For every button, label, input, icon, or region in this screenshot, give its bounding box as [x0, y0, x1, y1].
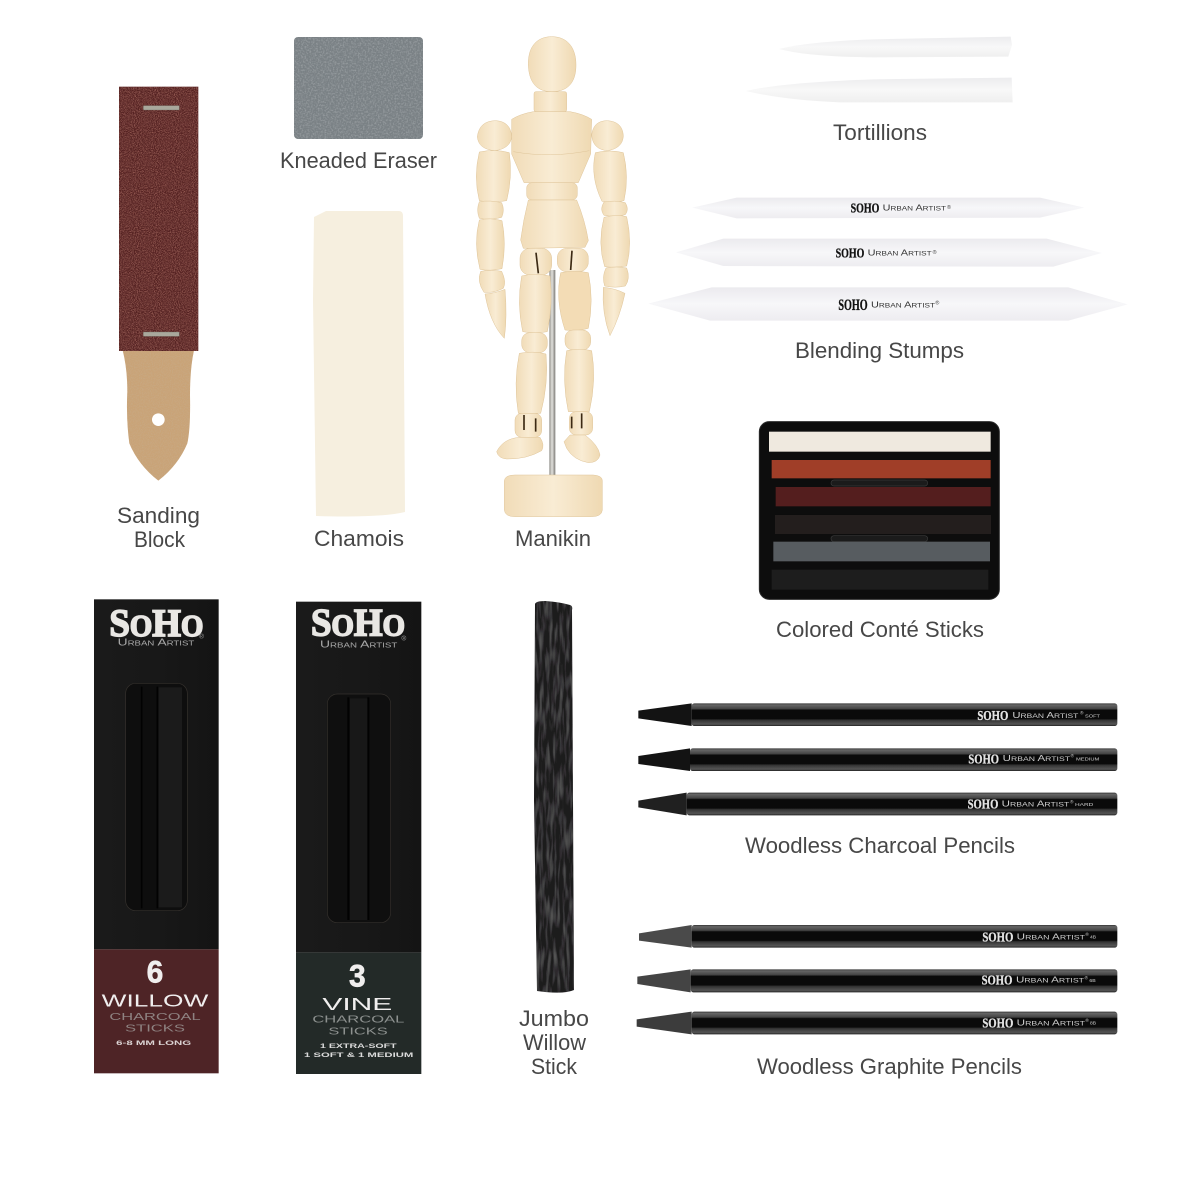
- box text: [102, 955, 209, 1047]
- stump 1: [692, 198, 1084, 218]
- item: kneaded eraser: [294, 37, 423, 139]
- label: Chamois: Chamois: [314, 526, 404, 551]
- item: blending stumps: [648, 198, 1128, 321]
- pencil 8B: ®: [1085, 1017, 1089, 1023]
- pencil soft: SOHO: [977, 709, 1008, 724]
- vine sticks in window: [348, 697, 368, 920]
- label: Sanding Block: Block: [134, 527, 186, 552]
- pencil hard: ®: [1070, 798, 1074, 804]
- pencil 4B: 4B: [1090, 934, 1096, 939]
- window: [327, 694, 391, 923]
- pencil soft: SOFT: [1085, 713, 1100, 718]
- pencil hard: SOHO: [968, 797, 998, 812]
- label: Woodless Graphite Pencils: Woodless Graphite Pencils: [757, 1054, 1022, 1079]
- right arm: [592, 121, 630, 336]
- grey stick: [773, 542, 990, 561]
- pencil 4B: Urban Artist: [1017, 932, 1085, 941]
- stump 2: ®: [933, 249, 937, 256]
- logo: ®: [401, 635, 406, 643]
- box body: [296, 602, 421, 953]
- label: Sanding Block: Sanding: [117, 503, 200, 528]
- pencil 4B: ®: [1085, 931, 1089, 937]
- stand rod: [549, 270, 555, 476]
- pencil soft: ®: [1080, 710, 1084, 716]
- stump 3: ®: [935, 299, 939, 306]
- box text: 1 SOFT & 1 MEDIUM: [304, 1052, 414, 1059]
- pencil medium: SOHO: [968, 752, 999, 767]
- box text: 6: [147, 955, 163, 990]
- pencil hard: Urban Artist: [1002, 800, 1070, 809]
- item: woodless charcoal pencils: [638, 703, 1117, 815]
- tortillion 1: [779, 37, 1012, 57]
- tray: [759, 422, 999, 599]
- label: Colored Conte Sticks: Colored Conté Sticks: [776, 617, 984, 642]
- waist: [527, 183, 577, 200]
- box text: CHARCOAL: [312, 1014, 405, 1025]
- sanguine stick: [772, 460, 991, 478]
- stump 2: SOHO: [836, 246, 864, 261]
- pencil soft: [638, 703, 1117, 726]
- head: [528, 37, 576, 92]
- pencil 4B: [639, 925, 1117, 948]
- cardboard tab: [123, 350, 194, 481]
- label: Kneaded Eraser: Kneaded Eraser: [280, 148, 437, 173]
- left arm: [476, 121, 512, 338]
- pencil soft: Urban Artist: [1012, 711, 1079, 720]
- logo: Urban Artist: [320, 639, 398, 650]
- pencil hard: HARD: [1075, 802, 1093, 807]
- box text: WILLOW: [102, 991, 209, 1011]
- torso: [512, 112, 592, 183]
- item: colored conte sticks tray: [759, 422, 999, 599]
- item: willow charcoal box: [94, 599, 219, 1073]
- box text: 6-8 MM LONG: [116, 1040, 191, 1047]
- pencil 4B: SOHO: [982, 931, 1013, 946]
- box text: 1 EXTRA-SOFT: [320, 1043, 397, 1050]
- label: Jumbo Willow Stick: Stick: [531, 1054, 578, 1079]
- tray clip bottom: [831, 536, 928, 542]
- box text: STICKS: [125, 1024, 185, 1035]
- maroon stick: [776, 487, 991, 506]
- pencil 6B: [637, 969, 1117, 992]
- stump 1: Urban Artist: [883, 203, 946, 212]
- stand base: [504, 475, 602, 517]
- item: tortillions: [746, 37, 1013, 102]
- box text: 3: [349, 959, 366, 994]
- box text: STICKS: [328, 1026, 388, 1037]
- stump 1: SOHO: [851, 202, 879, 217]
- pencil 6B: ®: [1085, 974, 1089, 980]
- logo: Urban Artist: [118, 637, 195, 648]
- pencil 8B: SOHO: [982, 1016, 1013, 1031]
- pencil 8B: 8B: [1090, 1021, 1096, 1026]
- bottom staple: [143, 332, 179, 336]
- stump 2: Urban Artist: [868, 248, 932, 257]
- left leg: [497, 248, 552, 459]
- pelvis: [521, 200, 588, 248]
- dark brown stick: [775, 515, 991, 534]
- white stick: [769, 432, 991, 452]
- box text: CHARCOAL: [109, 1012, 201, 1023]
- box text: VINE: [322, 994, 392, 1014]
- pencil medium: Urban Artist: [1003, 754, 1070, 763]
- label: Jumbo Willow Stick: Jumbo: [519, 1006, 589, 1031]
- pencil 6B: 6B: [1089, 978, 1096, 983]
- logo: SOHO: [311, 601, 405, 645]
- stump 1: ®: [947, 204, 951, 211]
- label: Manikin: Manikin: [515, 526, 591, 551]
- black stick: [772, 570, 988, 590]
- item: sanding block: [119, 87, 198, 481]
- stump 2: [676, 239, 1102, 267]
- logo: ®: [199, 632, 204, 640]
- stump 3: Urban Artist: [871, 301, 935, 310]
- chest shading: [513, 151, 589, 155]
- pencil medium: [638, 748, 1117, 771]
- tab hole: [152, 413, 165, 426]
- item: woodless graphite pencils: [637, 925, 1117, 1034]
- pencil medium: MEDIUM: [1076, 756, 1100, 761]
- label: Tortillions: Tortillions: [833, 120, 927, 145]
- item: vine charcoal box: [296, 601, 421, 1074]
- maroon band: [94, 949, 219, 1073]
- label: Jumbo Willow Stick: [519, 1006, 589, 1079]
- box text: [304, 959, 414, 1059]
- label: Sanding Block: [117, 503, 200, 552]
- pencil 8B: Urban Artist: [1017, 1018, 1085, 1027]
- tray clip top: [831, 480, 928, 486]
- label: Woodless Charcoal Pencils: Woodless Charcoal Pencils: [745, 833, 1015, 858]
- charcoal sticks in window: [142, 687, 157, 908]
- pencil 8B: [637, 1012, 1117, 1034]
- neck: [534, 92, 567, 112]
- top staple: [143, 106, 179, 110]
- right leg: [557, 248, 600, 463]
- tortillion 2: [746, 78, 1013, 102]
- pencil medium: ®: [1071, 753, 1075, 759]
- stump 3: SOHO: [838, 297, 868, 314]
- item: chamois: [313, 211, 405, 516]
- dark green band: [296, 953, 421, 1074]
- pencil hard: [638, 793, 1117, 815]
- logo: SOHO: [109, 601, 203, 645]
- box body: [94, 599, 219, 949]
- label: Blending Stumps: Blending Stumps: [795, 338, 964, 363]
- item: jumbo willow stick: [534, 601, 574, 993]
- stump 3: [648, 287, 1128, 321]
- item: wooden manikin: [476, 37, 630, 517]
- window: [126, 683, 187, 911]
- pencil 6B: SOHO: [982, 973, 1012, 988]
- sandpaper: [119, 87, 198, 351]
- label: Jumbo Willow Stick: Willow: [523, 1030, 586, 1055]
- pencil 6B: Urban Artist: [1016, 976, 1084, 985]
